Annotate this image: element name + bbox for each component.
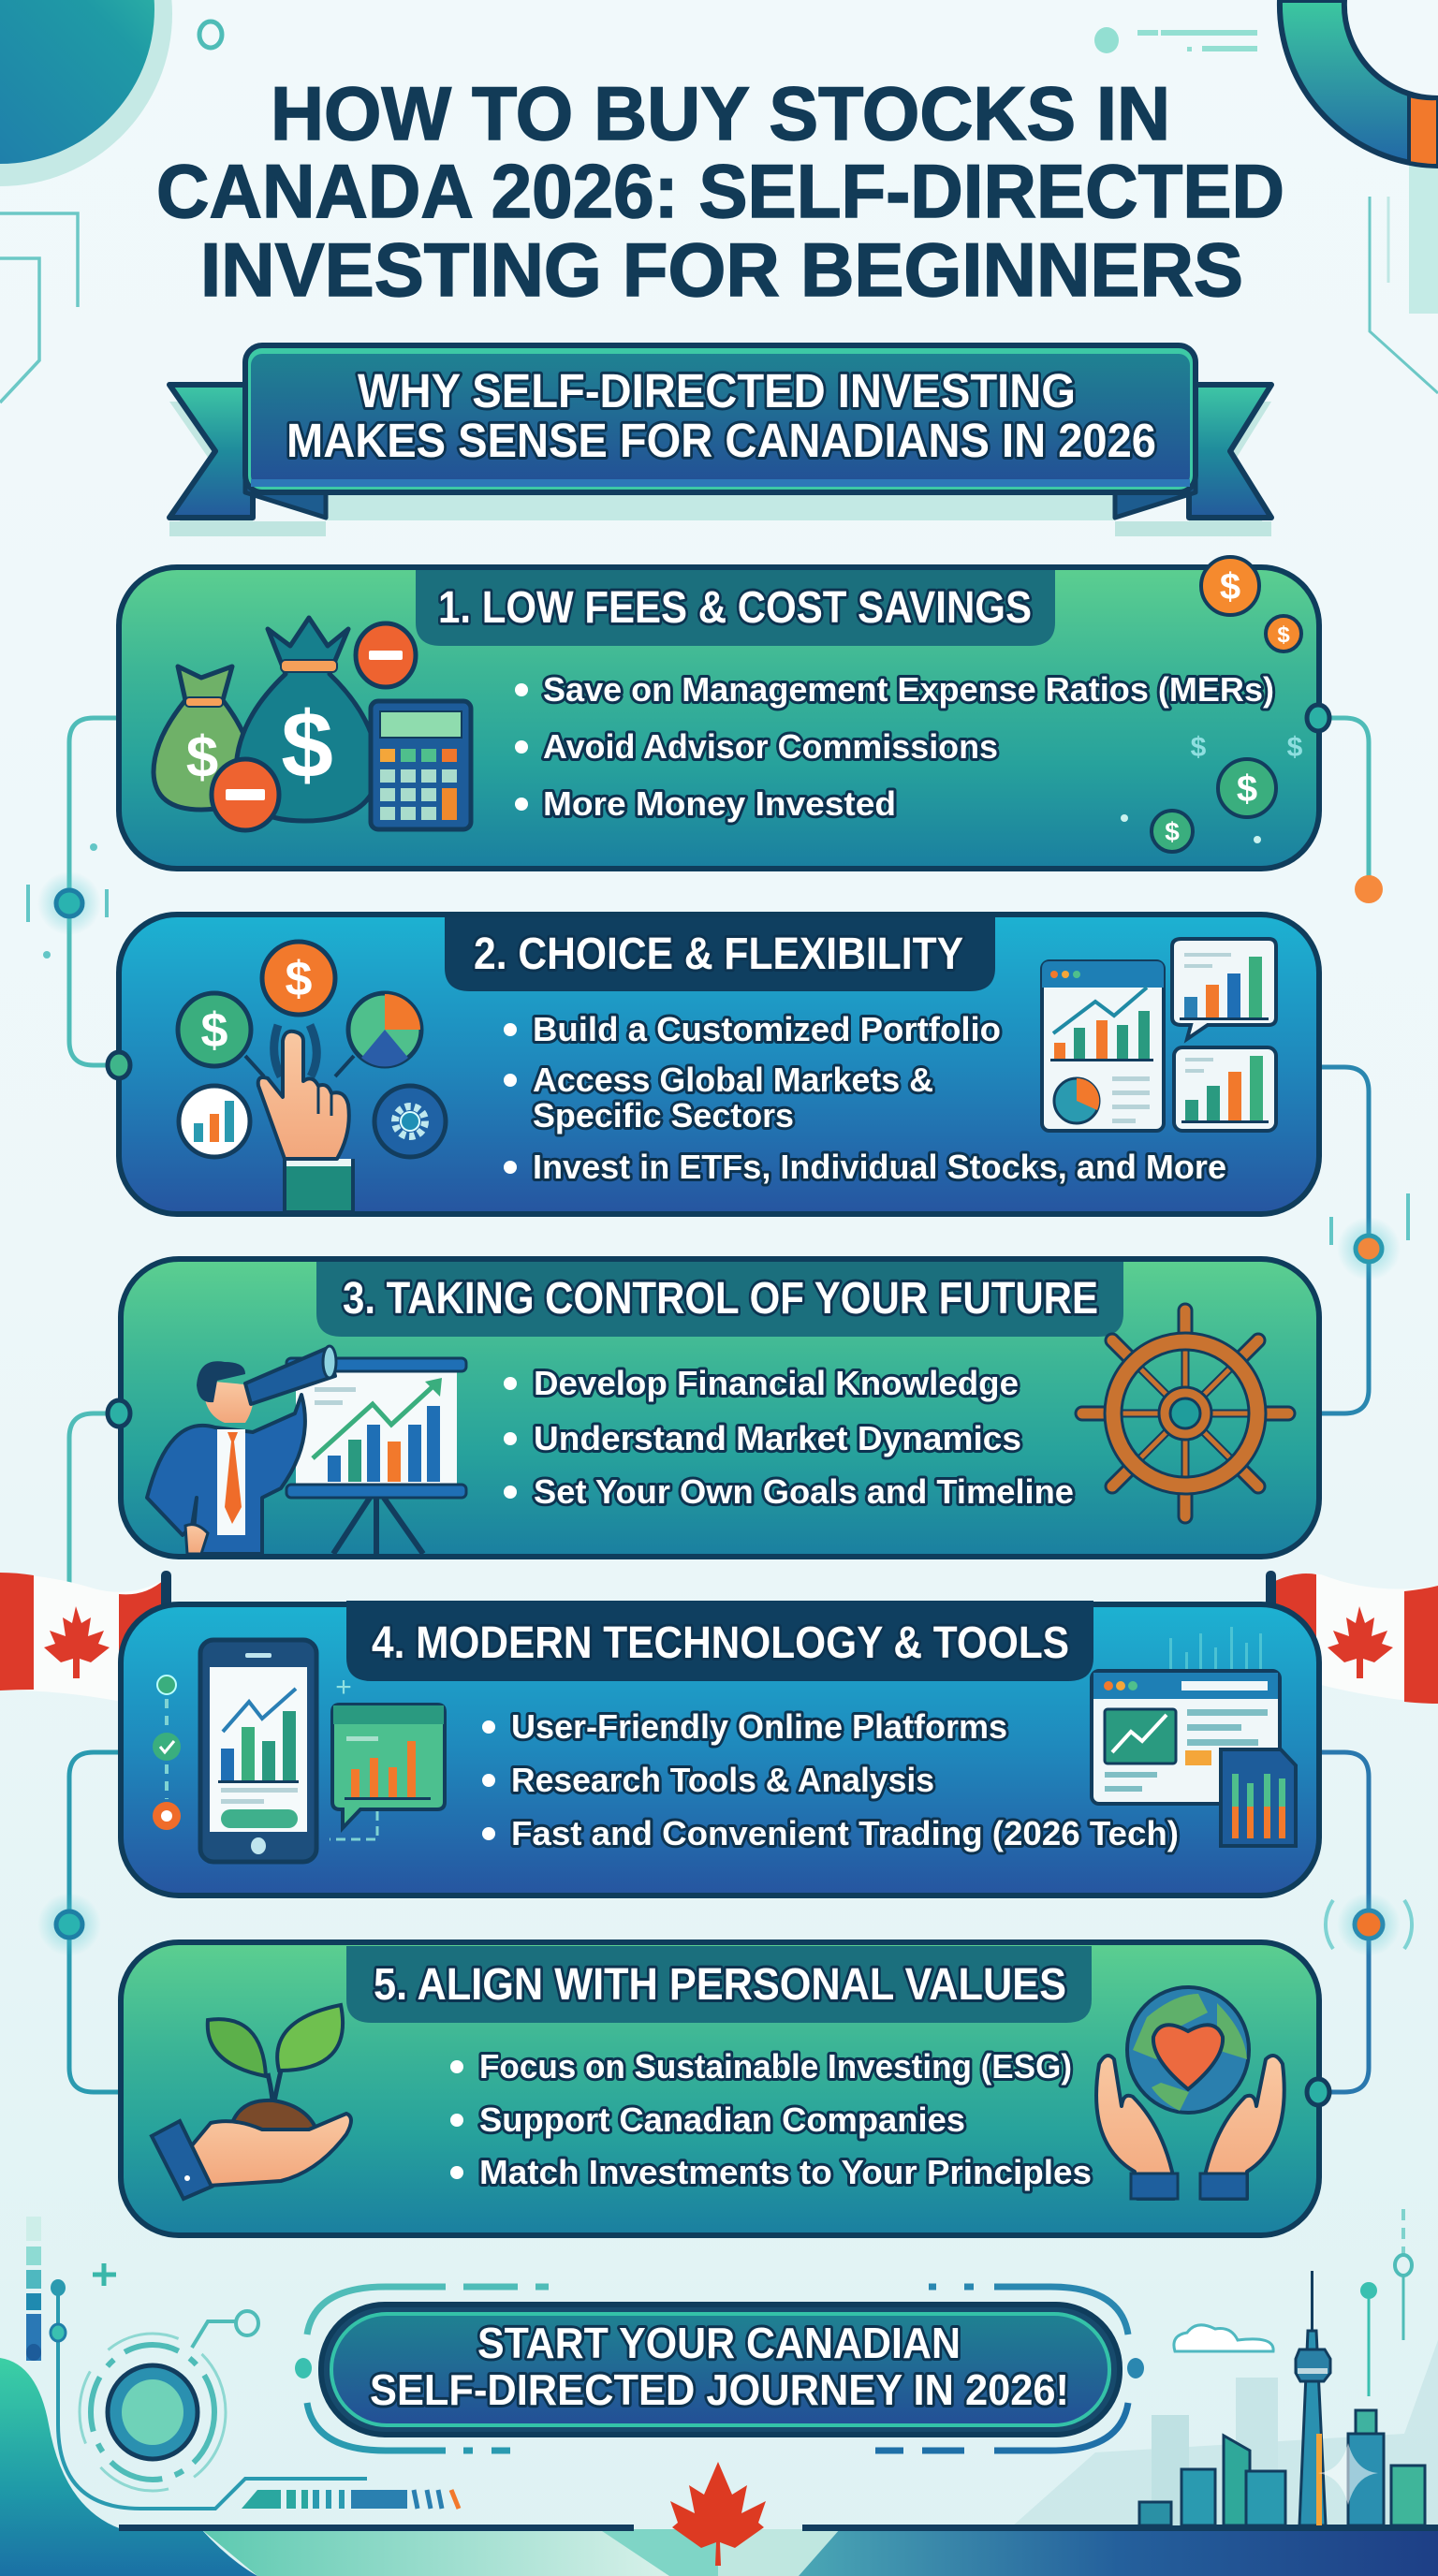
icon: ship wheel — [1082, 1310, 1288, 1516]
heading tab 4: 4. MODERN TECHNOLOGY & TOOLS — [372, 1618, 1069, 1668]
icon: document chart — [1221, 1749, 1296, 1846]
call to action text: SELF-DIRECTED JOURNEY IN 2026! — [370, 2365, 1069, 2414]
bullets 4: User-Friendly Online Platforms — [511, 1707, 1007, 1746]
bullets 3: Set Your Own Goals and Timeline — [534, 1472, 1074, 1511]
decoration: left circuit lines — [0, 213, 78, 402]
icon: pointing hand — [258, 1032, 353, 1212]
connector nodes — [26, 843, 1412, 1956]
panel: 5 personal values — [121, 1942, 1319, 2235]
icon: chat bubble chart — [330, 1705, 445, 1839]
icon: large money bag — [236, 618, 378, 821]
icon: radial gauge — [80, 2334, 226, 2491]
icon: browser window — [1092, 1671, 1280, 1804]
icon: coins: $ — [1277, 622, 1290, 648]
connector lines — [69, 718, 1369, 2092]
call to action text: START YOUR CANADIAN — [477, 2319, 961, 2367]
icon: coins: $ — [1287, 732, 1303, 763]
bullets 3 — [504, 1364, 1074, 1511]
title: CANADA 2026: SELF-DIRECTED — [156, 150, 1284, 234]
heading tab 5 — [346, 1946, 1092, 2023]
icon: small money bag — [154, 666, 253, 810]
icon: coins — [1121, 557, 1303, 852]
call to action text — [370, 2319, 1069, 2414]
bullets 1: Save on Management Expense Ratios (MERs) — [543, 670, 1274, 709]
heading tab 4 — [346, 1601, 1093, 1681]
decoration: top-right ring chart — [1280, 0, 1438, 314]
decoration: top small shapes — [199, 22, 1257, 53]
footer band — [0, 2340, 1438, 2576]
icon: charts group — [1042, 939, 1276, 1131]
icon: side status column: + — [335, 1672, 352, 1703]
bullets 1 — [515, 670, 1274, 823]
bullets 2: Build a Customized Portfolio — [533, 1010, 1001, 1048]
bullets 2: Specific Sectors — [533, 1096, 794, 1134]
bullets 4: Research Tools & Analysis — [511, 1761, 934, 1799]
icon: smartphone — [200, 1640, 316, 1862]
heading tab 5: 5. ALIGN WITH PERSONAL VALUES — [374, 1960, 1066, 2010]
icon: minus badges — [212, 623, 416, 830]
banner heading: WHY SELF-DIRECTED INVESTING — [358, 364, 1076, 417]
banner heading — [286, 364, 1156, 467]
heading tab 1: 1. LOW FEES & COST SAVINGS — [438, 583, 1032, 633]
heading tab 2: 2. CHOICE & FLEXIBILITY — [474, 929, 963, 979]
icon: large money bag: $ — [281, 693, 333, 798]
heading tab 3: 3. TAKING CONTROL OF YOUR FUTURE — [343, 1274, 1098, 1324]
icon: calculator — [371, 701, 471, 829]
bullets 5: Support Canadian Companies — [479, 2100, 965, 2139]
call to action button — [295, 2287, 1144, 2451]
icon: portfolio circles — [178, 942, 446, 1157]
heading tab 3 — [316, 1262, 1123, 1337]
icon: man with telescope — [147, 1346, 336, 1554]
icon: coins: $ — [1191, 732, 1207, 763]
title: INVESTING FOR BEGINNERS — [200, 228, 1243, 313]
icon: portfolio circles: $ — [286, 952, 313, 1006]
decoration: right circuit lines — [1370, 197, 1438, 393]
bullets 2: Invest in ETFs, Individual Stocks, and More — [533, 1148, 1226, 1186]
icon: cloud — [1174, 2325, 1273, 2351]
title: HOW TO BUY STOCKS IN — [271, 72, 1170, 156]
bullets 2 — [504, 1010, 1226, 1186]
icon: maple leaf — [670, 2462, 766, 2566]
heading tab 1 — [416, 570, 1055, 646]
bullets 1: More Money Invested — [543, 784, 896, 823]
icon: Canadian flag right — [1266, 1571, 1438, 1704]
bullets 2: Access Global Markets & — [533, 1061, 933, 1099]
bullets 1: Avoid Advisor Commissions — [543, 727, 998, 766]
banner heading: MAKES SENSE FOR CANADIANS IN 2026 — [286, 414, 1156, 467]
icon: coins: $ — [1237, 768, 1257, 810]
icon: presentation board — [286, 1358, 466, 1554]
decoration: top-left circle — [0, 0, 172, 186]
icon: portfolio circles: $ — [201, 1003, 228, 1058]
node dots on panels — [108, 705, 1329, 2105]
toronto skyline — [1139, 2271, 1425, 2525]
panel: 1 low fees — [119, 557, 1319, 869]
bullets 5: Focus on Sustainable Investing (ESG) — [479, 2047, 1072, 2086]
decoration: footer circuit lines — [26, 2217, 1438, 2531]
bullets 4 — [482, 1707, 1179, 1852]
bullets 4: Fast and Convenient Trading (2026 Tech) — [511, 1814, 1179, 1852]
title — [156, 72, 1284, 313]
icon: Canadian flag left — [0, 1571, 171, 1702]
panel: 4 modern technology — [121, 1601, 1319, 1895]
icon: side status column — [153, 1672, 352, 1830]
heading tab 2 — [445, 917, 995, 991]
panel: 2 choice and flexibility — [119, 915, 1319, 1214]
icon: faint bars — [1169, 1627, 1262, 1669]
banner ribbon — [169, 345, 1271, 536]
bullets 3: Understand Market Dynamics — [534, 1419, 1021, 1457]
icon: CN tower — [1296, 2271, 1330, 2525]
bullets 3: Develop Financial Knowledge — [534, 1364, 1019, 1402]
icon: plant in hand — [152, 2005, 351, 2199]
bullets 5 — [450, 2047, 1092, 2191]
panel: 3 taking control — [121, 1259, 1319, 1557]
decoration: right footer pins — [1318, 2209, 1412, 2505]
icon: coins: $ — [1220, 566, 1240, 607]
icon: small money bag: $ — [186, 725, 218, 790]
icon: coins: $ — [1165, 817, 1180, 846]
icon: globe with heart and hands — [1096, 1987, 1284, 2199]
bullets 5: Match Investments to Your Principles — [479, 2153, 1092, 2191]
